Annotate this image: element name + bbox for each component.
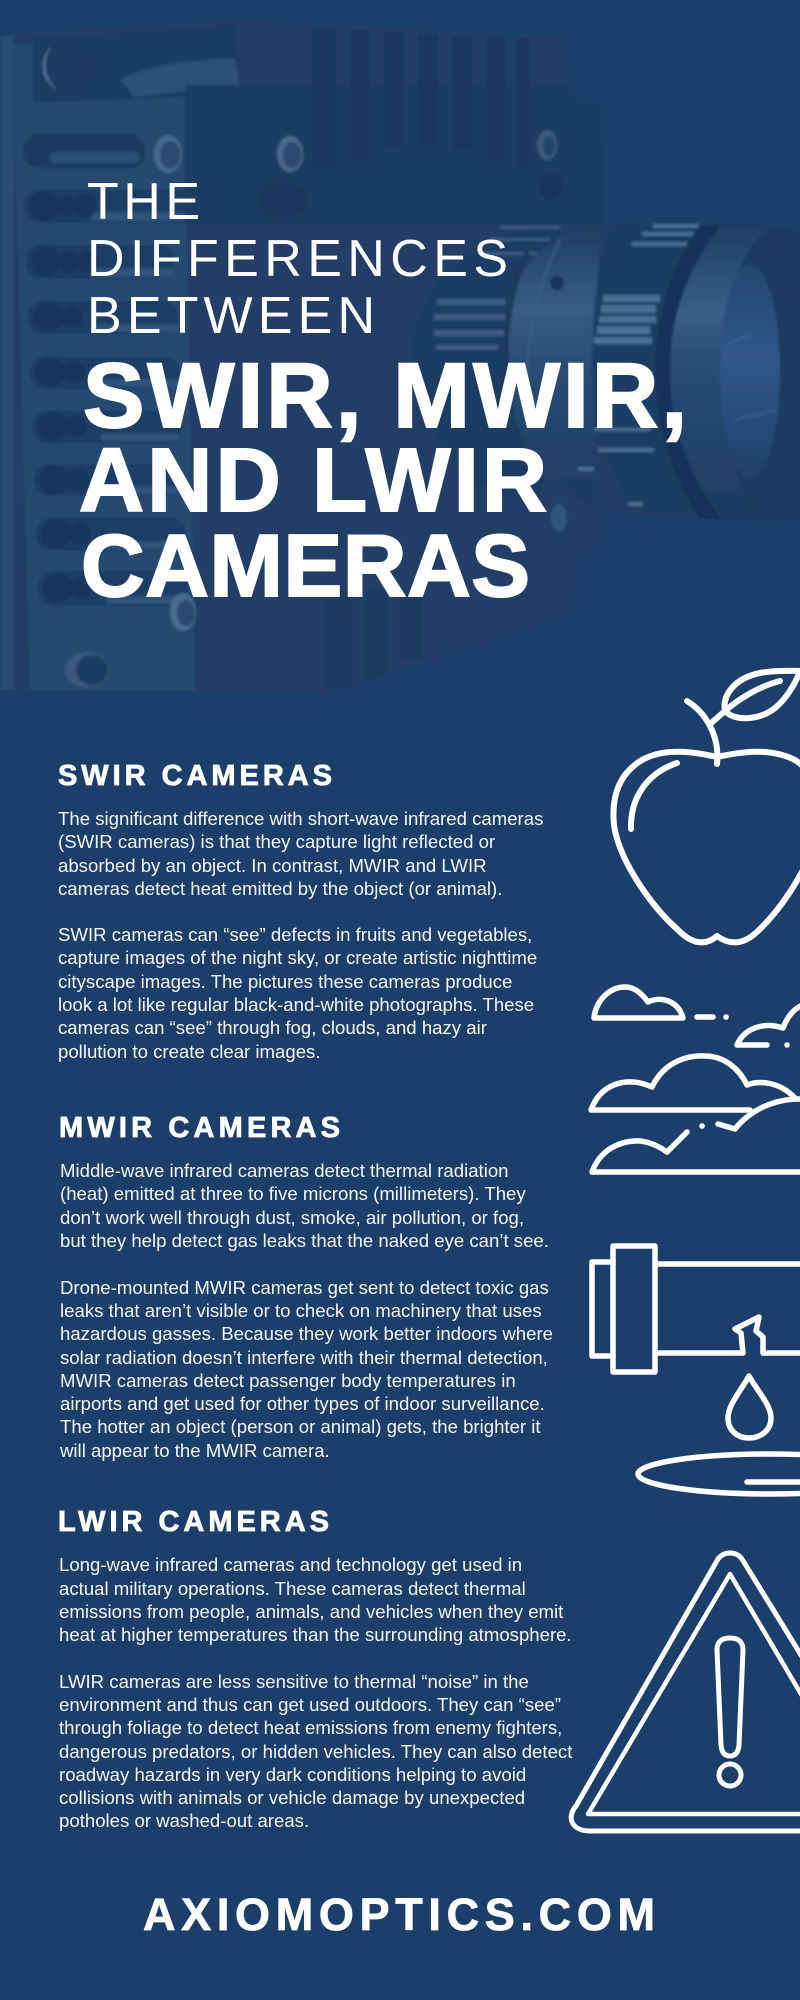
title: bold lines: [79, 345, 687, 615]
title: [79, 173, 687, 615]
text block: SWIR paragraph 1: (SWIR cameras) is that they capture light reflected or: [58, 831, 495, 852]
text block: LWIR paragraph 2: roadway hazards in very dark conditions helping to avoid: [59, 1764, 526, 1785]
text block: LWIR paragraph 1: actual military operations. These cameras detect thermal: [59, 1578, 526, 1599]
top bracket: [34, 40, 185, 102]
text block: LWIR paragraph 1: Long-wave infrared cameras and technology get used in: [59, 1554, 522, 1575]
text block: MWIR paragraph 2: will appear to the MWIR camera.: [59, 1440, 330, 1461]
icon: leaking pipe: [592, 1246, 800, 1494]
heading: MWIR: MWIR CAMERAS: [59, 1112, 340, 1144]
text block: MWIR paragraph 2: [59, 1277, 553, 1461]
title: light intro lines: [87, 173, 508, 345]
text block: LWIR paragraph 2: potholes or washed-out areas.: [59, 1810, 309, 1831]
text block: SWIR paragraph 2: cameras can “see” through fog, clouds, and hazy air: [58, 1017, 487, 1038]
text block: LWIR paragraph 1: emissions from people, animals, and vehicles when they emit: [59, 1601, 564, 1622]
lens middle barrel: [508, 244, 599, 432]
top slot: [23, 134, 145, 168]
title: bold lines: AND LWIR: [79, 431, 547, 531]
heading: LWIR: LWIR CAMERAS: [58, 1506, 329, 1538]
text block: MWIR paragraph 2: leaks that aren’t visible or to check on machinery that uses: [60, 1300, 542, 1321]
text block: MWIR paragraph 1: Middle-wave infrared cameras detect thermal radiation: [60, 1160, 509, 1181]
heat-sink fins: [312, 28, 530, 168]
text block: MWIR paragraph 2: The hotter an object (person or animal) gets, the brighter it: [60, 1416, 541, 1437]
text block: LWIR paragraph 2: collisions with animals or vehicle damage by unexpected: [59, 1787, 525, 1808]
section: LWIR cameras: [58, 1506, 573, 1831]
heading: SWIR: SWIR CAMERAS: [58, 760, 332, 792]
lens front glass: [740, 238, 800, 450]
text block: SWIR paragraph 1: cameras detect heat emitted by the object (or animal).: [58, 878, 502, 899]
text block: LWIR paragraph 2: through foliage to detect heat emissions from enemy fighters,: [59, 1717, 562, 1738]
section: MWIR cameras: [59, 1112, 553, 1461]
icon: apple: [613, 671, 800, 942]
text block: SWIR paragraph 2: SWIR cameras can “see” defects in fruits and vegetables,: [58, 924, 532, 945]
text block: LWIR paragraph 2: [59, 1671, 573, 1831]
section: SWIR cameras: [58, 760, 543, 1062]
title: light intro lines: BETWEEN: [87, 287, 375, 345]
title: bold lines: CAMERAS: [81, 516, 530, 615]
text block: SWIR paragraph 2: pollution to create clear images.: [58, 1041, 321, 1062]
footer website: AXIOMOPTICS.COM: [143, 1889, 655, 1940]
text block: MWIR paragraph 1: but they help detect gas leaks that the naked eye can’t see.: [60, 1230, 549, 1251]
text block: MWIR paragraph 2: airports and get used for other types of indoor surveillance.: [60, 1393, 545, 1414]
text block: MWIR paragraph 1: don’t work well through dust, smoke, air pollution, or fog,: [60, 1207, 524, 1228]
text block: LWIR paragraph 2: environment and thus can get used outdoors. They can “see”: [59, 1694, 561, 1715]
text block: LWIR paragraph 2: dangerous predators, or hidden vehicles. They can also detect: [59, 1741, 573, 1762]
text block: SWIR paragraph 2: cityscape images. The pictures these cameras produce: [58, 971, 512, 992]
text block: LWIR paragraph 1: [59, 1554, 572, 1645]
front barrel and dark collar: [656, 222, 720, 519]
lower body fins: [325, 590, 422, 690]
text block: MWIR paragraph 2: hazardous gasses. Because they work better indoors where: [60, 1323, 553, 1344]
text block: SWIR paragraph 1: [58, 808, 543, 899]
text block: MWIR paragraph 2: Drone-mounted MWIR cameras get sent to detect toxic gas: [60, 1277, 549, 1298]
title: bold lines: SWIR, MWIR,: [83, 345, 687, 447]
lens grip ring: [592, 280, 600, 406]
text block: SWIR paragraph 2: capture images of the night sky, or create artistic nighttime: [58, 947, 537, 968]
text block: MWIR paragraph 2: MWIR cameras detect passenger body temperatures in: [60, 1370, 516, 1391]
body dark block: [184, 85, 228, 222]
text block: LWIR paragraph 1: heat at higher temperatures than the surrounding atmosphere.: [59, 1624, 572, 1645]
left plate: [12, 40, 195, 690]
text block: MWIR paragraph 1: (heat) emitted at three to five microns (millimeters). They: [60, 1183, 526, 1204]
text block: LWIR paragraph 2: LWIR cameras are less sensitive to thermal “noise” in the: [59, 1671, 529, 1692]
text block: SWIR paragraph 1: The significant difference with short-wave infrared cameras: [58, 808, 543, 829]
lens rear ring: [413, 228, 560, 505]
text block: MWIR paragraph 1: [60, 1160, 549, 1251]
icon: clouds: [591, 987, 800, 1172]
text block: SWIR paragraph 1: absorbed by an object. In contrast, MWIR and LWIR: [58, 855, 487, 876]
title: light intro lines: THE: [87, 173, 200, 231]
text block: SWIR paragraph 2: look a lot like regular black-and-white photographs. These: [58, 994, 534, 1015]
screws: [154, 135, 182, 173]
title: light intro lines: DIFFERENCES: [87, 230, 508, 288]
icon: warning triangle: [571, 1553, 800, 1831]
camera photo: [0, 0, 800, 700]
text block: MWIR paragraph 2: solar radiation doesn’t interfere with their thermal detection,: [60, 1347, 548, 1368]
slots with holes: [24, 190, 188, 606]
text block: SWIR paragraph 2: [58, 924, 537, 1062]
